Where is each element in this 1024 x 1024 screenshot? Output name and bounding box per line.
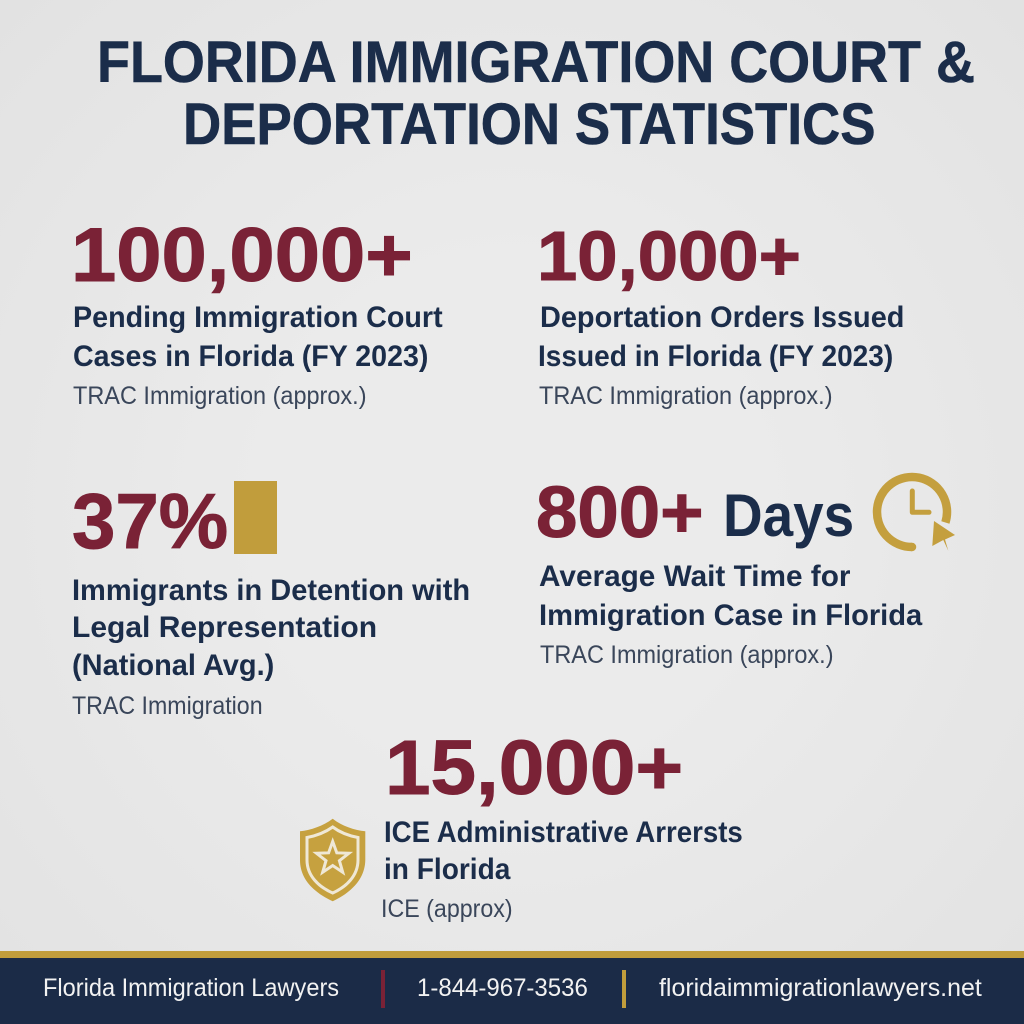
- title: [97, 30, 975, 157]
- stat: deportation orders: [537, 217, 904, 410]
- label line 2: Legal Representation: [72, 611, 377, 644]
- source: TRAC Immigration (approx.): [539, 382, 833, 410]
- label line 1: Deportation Orders Issued: [540, 301, 904, 334]
- label line 2: Immigration Case in Florida: [539, 599, 922, 632]
- label line 2: Cases in Florida (FY 2023): [73, 340, 428, 373]
- footer gold stripe: [0, 951, 1024, 958]
- label line 3: (National Avg.): [72, 649, 274, 682]
- source: TRAC Immigration (approx.): [540, 641, 834, 669]
- stat: pending cases: [71, 213, 443, 410]
- label line 1: Pending Immigration Court: [73, 301, 443, 334]
- footer divider red: [381, 970, 385, 1008]
- icon: shield with star: [300, 818, 366, 902]
- label line 2: Issued in Florida (FY 2023): [538, 340, 893, 373]
- title line 1: FLORIDA IMMIGRATION COURT &: [97, 30, 975, 95]
- source: TRAC Immigration: [72, 692, 263, 720]
- source: TRAC Immigration (approx.): [73, 382, 367, 410]
- footer website: floridaimmigrationlawyers.net: [659, 974, 982, 1002]
- label line 1: Average Wait Time for: [539, 560, 850, 593]
- title line 2: DEPORTATION STATISTICS: [183, 92, 876, 157]
- stat: legal representation: [72, 477, 470, 720]
- label line 2: in Florida: [384, 853, 510, 886]
- unit: Days: Days: [723, 482, 854, 549]
- footer band: [0, 951, 1024, 1024]
- number: 10,000+: 10,000+: [537, 217, 801, 295]
- number: 15,000+: 15,000+: [385, 725, 683, 811]
- icon: gold bar: [234, 481, 277, 554]
- number: 100,000+: 100,000+: [71, 213, 413, 298]
- icon: clock with cursor: [872, 472, 955, 552]
- number: 37%: 37%: [72, 477, 228, 565]
- footer firm name: Florida Immigration Lawyers: [43, 974, 339, 1002]
- number: 800+: 800+: [536, 473, 704, 553]
- source: ICE (approx): [381, 895, 513, 923]
- footer phone: 1-844-967-3536: [417, 974, 588, 1002]
- footer divider gold: [622, 970, 626, 1008]
- stat: wait time: [536, 473, 922, 669]
- label line 1: Immigrants in Detention with: [72, 574, 470, 607]
- label line 1: ICE Administrative Arrersts: [384, 816, 743, 849]
- stat: ICE arrests: [381, 725, 743, 923]
